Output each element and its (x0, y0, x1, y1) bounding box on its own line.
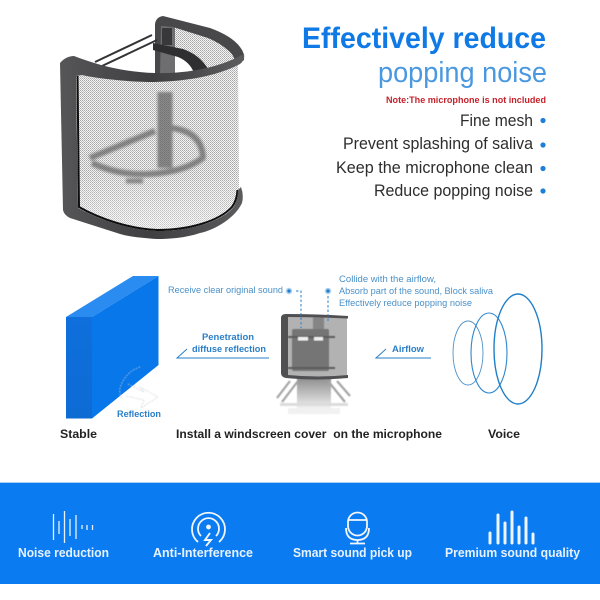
inner black edge (78, 76, 238, 230)
label: smart sound: Smart sound pick up (293, 546, 412, 560)
collide dot (325, 288, 331, 294)
windscreen mesh (284, 315, 347, 378)
bracket (153, 43, 208, 73)
mic body (288, 317, 335, 371)
icon: anti-interference (192, 513, 225, 546)
back frame rim (155, 16, 244, 76)
blue wall block (66, 276, 158, 418)
microphone with windscreen (277, 314, 350, 414)
block side (92, 276, 158, 418)
callout: clear sound (168, 285, 292, 296)
captions (60, 427, 520, 441)
label: premium sound: Premium sound quality (445, 546, 580, 560)
item: clean: Keep the microphone clean (336, 158, 533, 177)
icon: sound bars (490, 512, 533, 543)
mic stand (277, 378, 350, 414)
callout dot (286, 288, 292, 294)
item: fine mesh: Fine mesh (460, 111, 533, 130)
callout text: Receive clear original sound (168, 285, 283, 296)
back column (160, 24, 175, 76)
bracket knob (162, 28, 172, 45)
block top (66, 276, 158, 317)
label: penetration (177, 332, 269, 358)
item: popping: Reduce popping noise (374, 181, 533, 200)
caption: stable: Stable (60, 427, 97, 441)
back mesh (172, 26, 236, 72)
caption: install: Install a windscreen cover on the microphone (176, 427, 442, 441)
title line 1: Effectively reduce (302, 22, 546, 55)
mesh panel (76, 62, 239, 232)
arrow: airflow (376, 349, 431, 358)
collide line 3: Effectively reduce popping noise (339, 298, 472, 309)
callout: collide (325, 274, 494, 309)
heading (302, 22, 547, 89)
title line 2: popping noise (378, 57, 547, 89)
penetration text: Penetration (202, 332, 254, 343)
label: airflow (376, 344, 431, 358)
feature list (336, 111, 546, 200)
rods (95, 35, 157, 66)
dashed leader lines (296, 291, 328, 328)
feature band (0, 482, 600, 584)
block front (66, 317, 92, 418)
diffuse text: diffuse reflection (192, 344, 266, 355)
product photo: pop filter (60, 16, 244, 239)
bullets (540, 118, 546, 194)
label: noise reduction: Noise reduction (18, 546, 109, 560)
band top highlight (0, 482, 600, 483)
windscreen frame (281, 314, 348, 380)
voice waves (453, 294, 542, 404)
item: saliva: Prevent splashing of saliva (343, 134, 534, 153)
airflow text: Airflow (392, 344, 425, 355)
icon: microphone (346, 512, 369, 544)
caption: voice: Voice (488, 427, 520, 441)
collide line 2: Absorb part of the sound, Block saliva (339, 286, 494, 297)
arrow: penetration (177, 349, 269, 358)
band background (0, 482, 600, 584)
collide line 1: Collide with the airflow, (339, 274, 436, 285)
label: reflection: Reflection (117, 409, 161, 420)
interior mount seen through mesh (90, 92, 204, 181)
note: Note:The microphone is not included (386, 95, 546, 106)
icon: noise waveform (54, 511, 92, 543)
front frame (60, 54, 244, 239)
mesh highlight (76, 62, 239, 232)
dashed reflection marks (120, 367, 158, 408)
label: anti-interference: Anti-Interference (153, 546, 253, 560)
